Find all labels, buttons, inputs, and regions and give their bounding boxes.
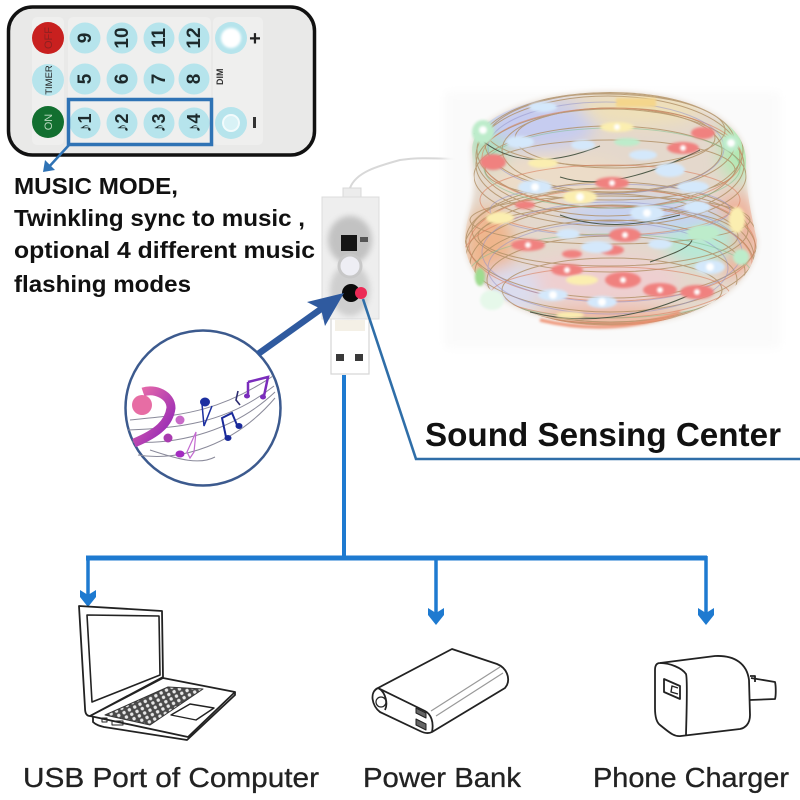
text block: music mode [14, 173, 315, 297]
button labels: 10 [112, 27, 133, 49]
module body [322, 197, 379, 319]
USB plug [331, 318, 369, 374]
label: power bank: Power Bank [363, 762, 522, 793]
button: TIMER: TIMER [44, 65, 55, 95]
button labels: 7 [149, 74, 170, 84]
button: ON: ON [43, 114, 55, 130]
brightness up button [215, 22, 261, 54]
chip [341, 235, 357, 251]
button labels: ♪4 [184, 113, 204, 133]
light centres [479, 124, 735, 306]
icon: phone charger [655, 656, 776, 736]
arrow heads [80, 590, 714, 625]
power distribution arrows [80, 375, 714, 625]
button: OFF [32, 22, 64, 54]
button labels: 11 [149, 28, 170, 48]
text block: music mode: MUSIC MODE, [14, 173, 178, 199]
panel: remote control [8, 7, 314, 155]
button labels: 9 [75, 33, 96, 43]
label: phone charger: Phone Charger [593, 762, 789, 793]
heading: sound sensing center: Sound Sensing Center [425, 416, 781, 453]
label: USB port of computer: USB Port of Computer [23, 762, 319, 793]
string lights coil [445, 92, 780, 348]
button labels [75, 27, 205, 133]
button labels: ♪1 [75, 113, 95, 133]
staff lines [128, 376, 275, 461]
button: ON [32, 106, 64, 138]
yellow lights [486, 98, 745, 318]
DIM label: DIM [215, 68, 225, 85]
button labels: 12 [184, 27, 205, 49]
microphone [342, 284, 360, 302]
button labels: ♪2 [112, 113, 132, 133]
USB controller module [322, 188, 379, 374]
red lights [480, 127, 715, 299]
number buttons [70, 22, 210, 138]
wire from module to lights [350, 158, 475, 188]
leader line to sound sensing label [363, 299, 800, 459]
button: TIMER [32, 64, 64, 96]
blue-white lights [506, 102, 725, 308]
button labels: 6 [112, 74, 133, 84]
text block: music mode: optional 4 different music [14, 237, 315, 263]
coil colour glow [460, 92, 759, 328]
keyboard [105, 687, 203, 725]
icon: power bank [372, 649, 508, 733]
music notes circle [126, 330, 280, 486]
arrow: notes circle to microphone [258, 293, 344, 354]
text block: music mode: Twinkling sync to music , [14, 205, 305, 231]
notes [176, 377, 268, 458]
brightness up button: + [249, 28, 261, 50]
coil body [465, 92, 757, 326]
dark wire accents [474, 133, 700, 319]
button: OFF: OFF [43, 27, 55, 49]
music button highlight and pointer arrow [43, 100, 212, 172]
button labels: ♪3 [149, 113, 169, 133]
coil wires [464, 92, 758, 325]
button labels: 5 [75, 73, 96, 84]
warm base edge [540, 312, 680, 327]
text block: music mode: flashing modes [14, 271, 191, 297]
green lights [472, 120, 749, 310]
button labels: 8 [184, 74, 205, 84]
module tab [343, 188, 361, 198]
photo backdrop [445, 92, 780, 348]
brightness down button [215, 107, 256, 139]
LED lens [339, 255, 361, 277]
bass clef [132, 391, 184, 443]
icon: laptop [79, 606, 235, 740]
